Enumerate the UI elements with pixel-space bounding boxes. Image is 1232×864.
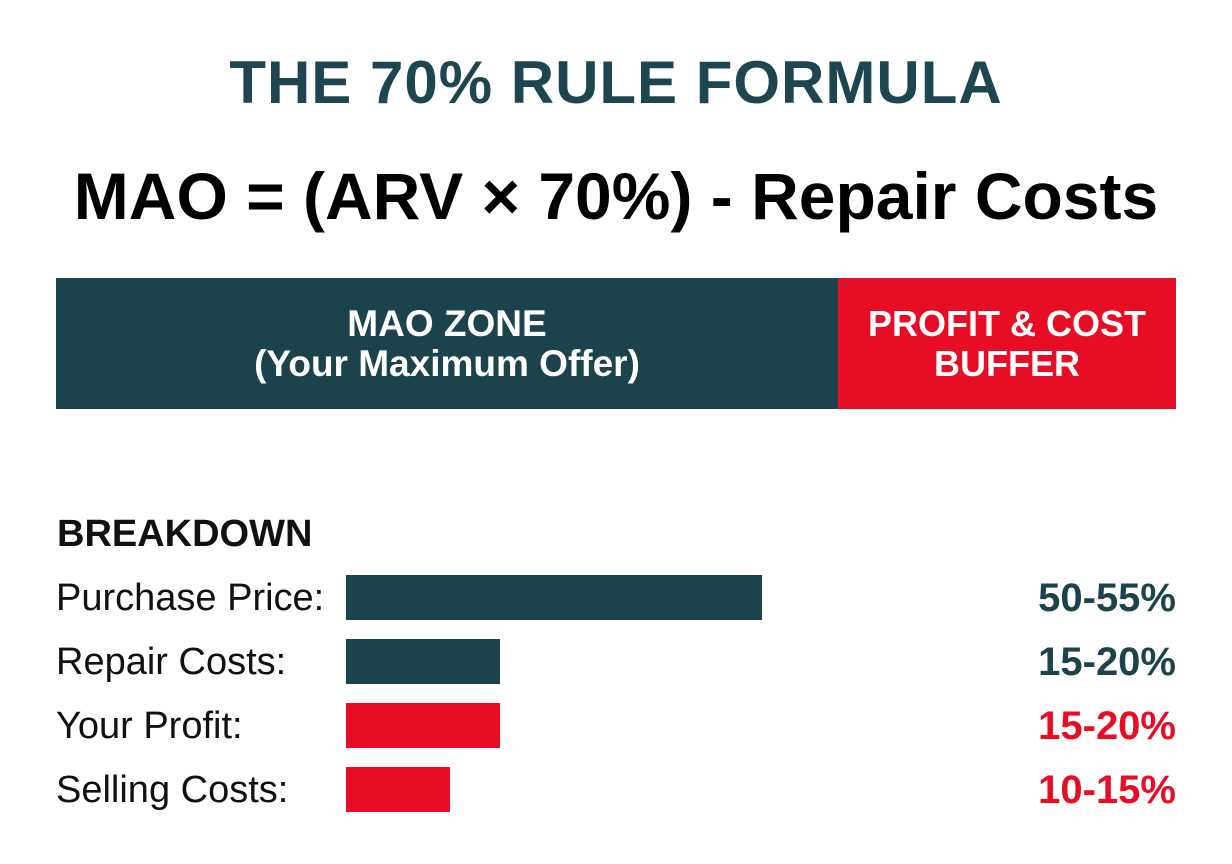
MAO zone <box>56 278 838 409</box>
row: purchase price <box>56 575 1176 620</box>
row: selling costs: Selling Costs: <box>56 769 288 811</box>
profit buffer: PROFIT & COST <box>868 302 1146 344</box>
formula: MAO = (ARV × 70%) - Repair Costs <box>74 159 1158 233</box>
profit buffer <box>838 278 1176 409</box>
row: repair costs <box>56 639 1176 684</box>
row: repair costs: Repair Costs: <box>56 641 286 683</box>
row: selling costs: 10-15% <box>1038 768 1176 812</box>
row: selling costs <box>56 767 1176 812</box>
row: profit: Your Profit: <box>56 705 243 747</box>
row: purchase price: 50-55% <box>1038 576 1176 620</box>
MAO zone: MAO ZONE <box>347 302 547 344</box>
zone bar <box>56 278 1176 409</box>
breakdown heading: BREAKDOWN <box>57 513 312 555</box>
row: repair costs: 15-20% <box>1038 640 1176 684</box>
MAO zone: (Your Maximum Offer) <box>254 342 640 384</box>
row: profit <box>56 703 1176 748</box>
title: THE 70% RULE FORMULA <box>229 49 1003 116</box>
row: profit: 15-20% <box>1038 704 1176 748</box>
profit buffer: BUFFER <box>934 342 1080 384</box>
row: purchase price: Purchase Price: <box>56 577 324 619</box>
